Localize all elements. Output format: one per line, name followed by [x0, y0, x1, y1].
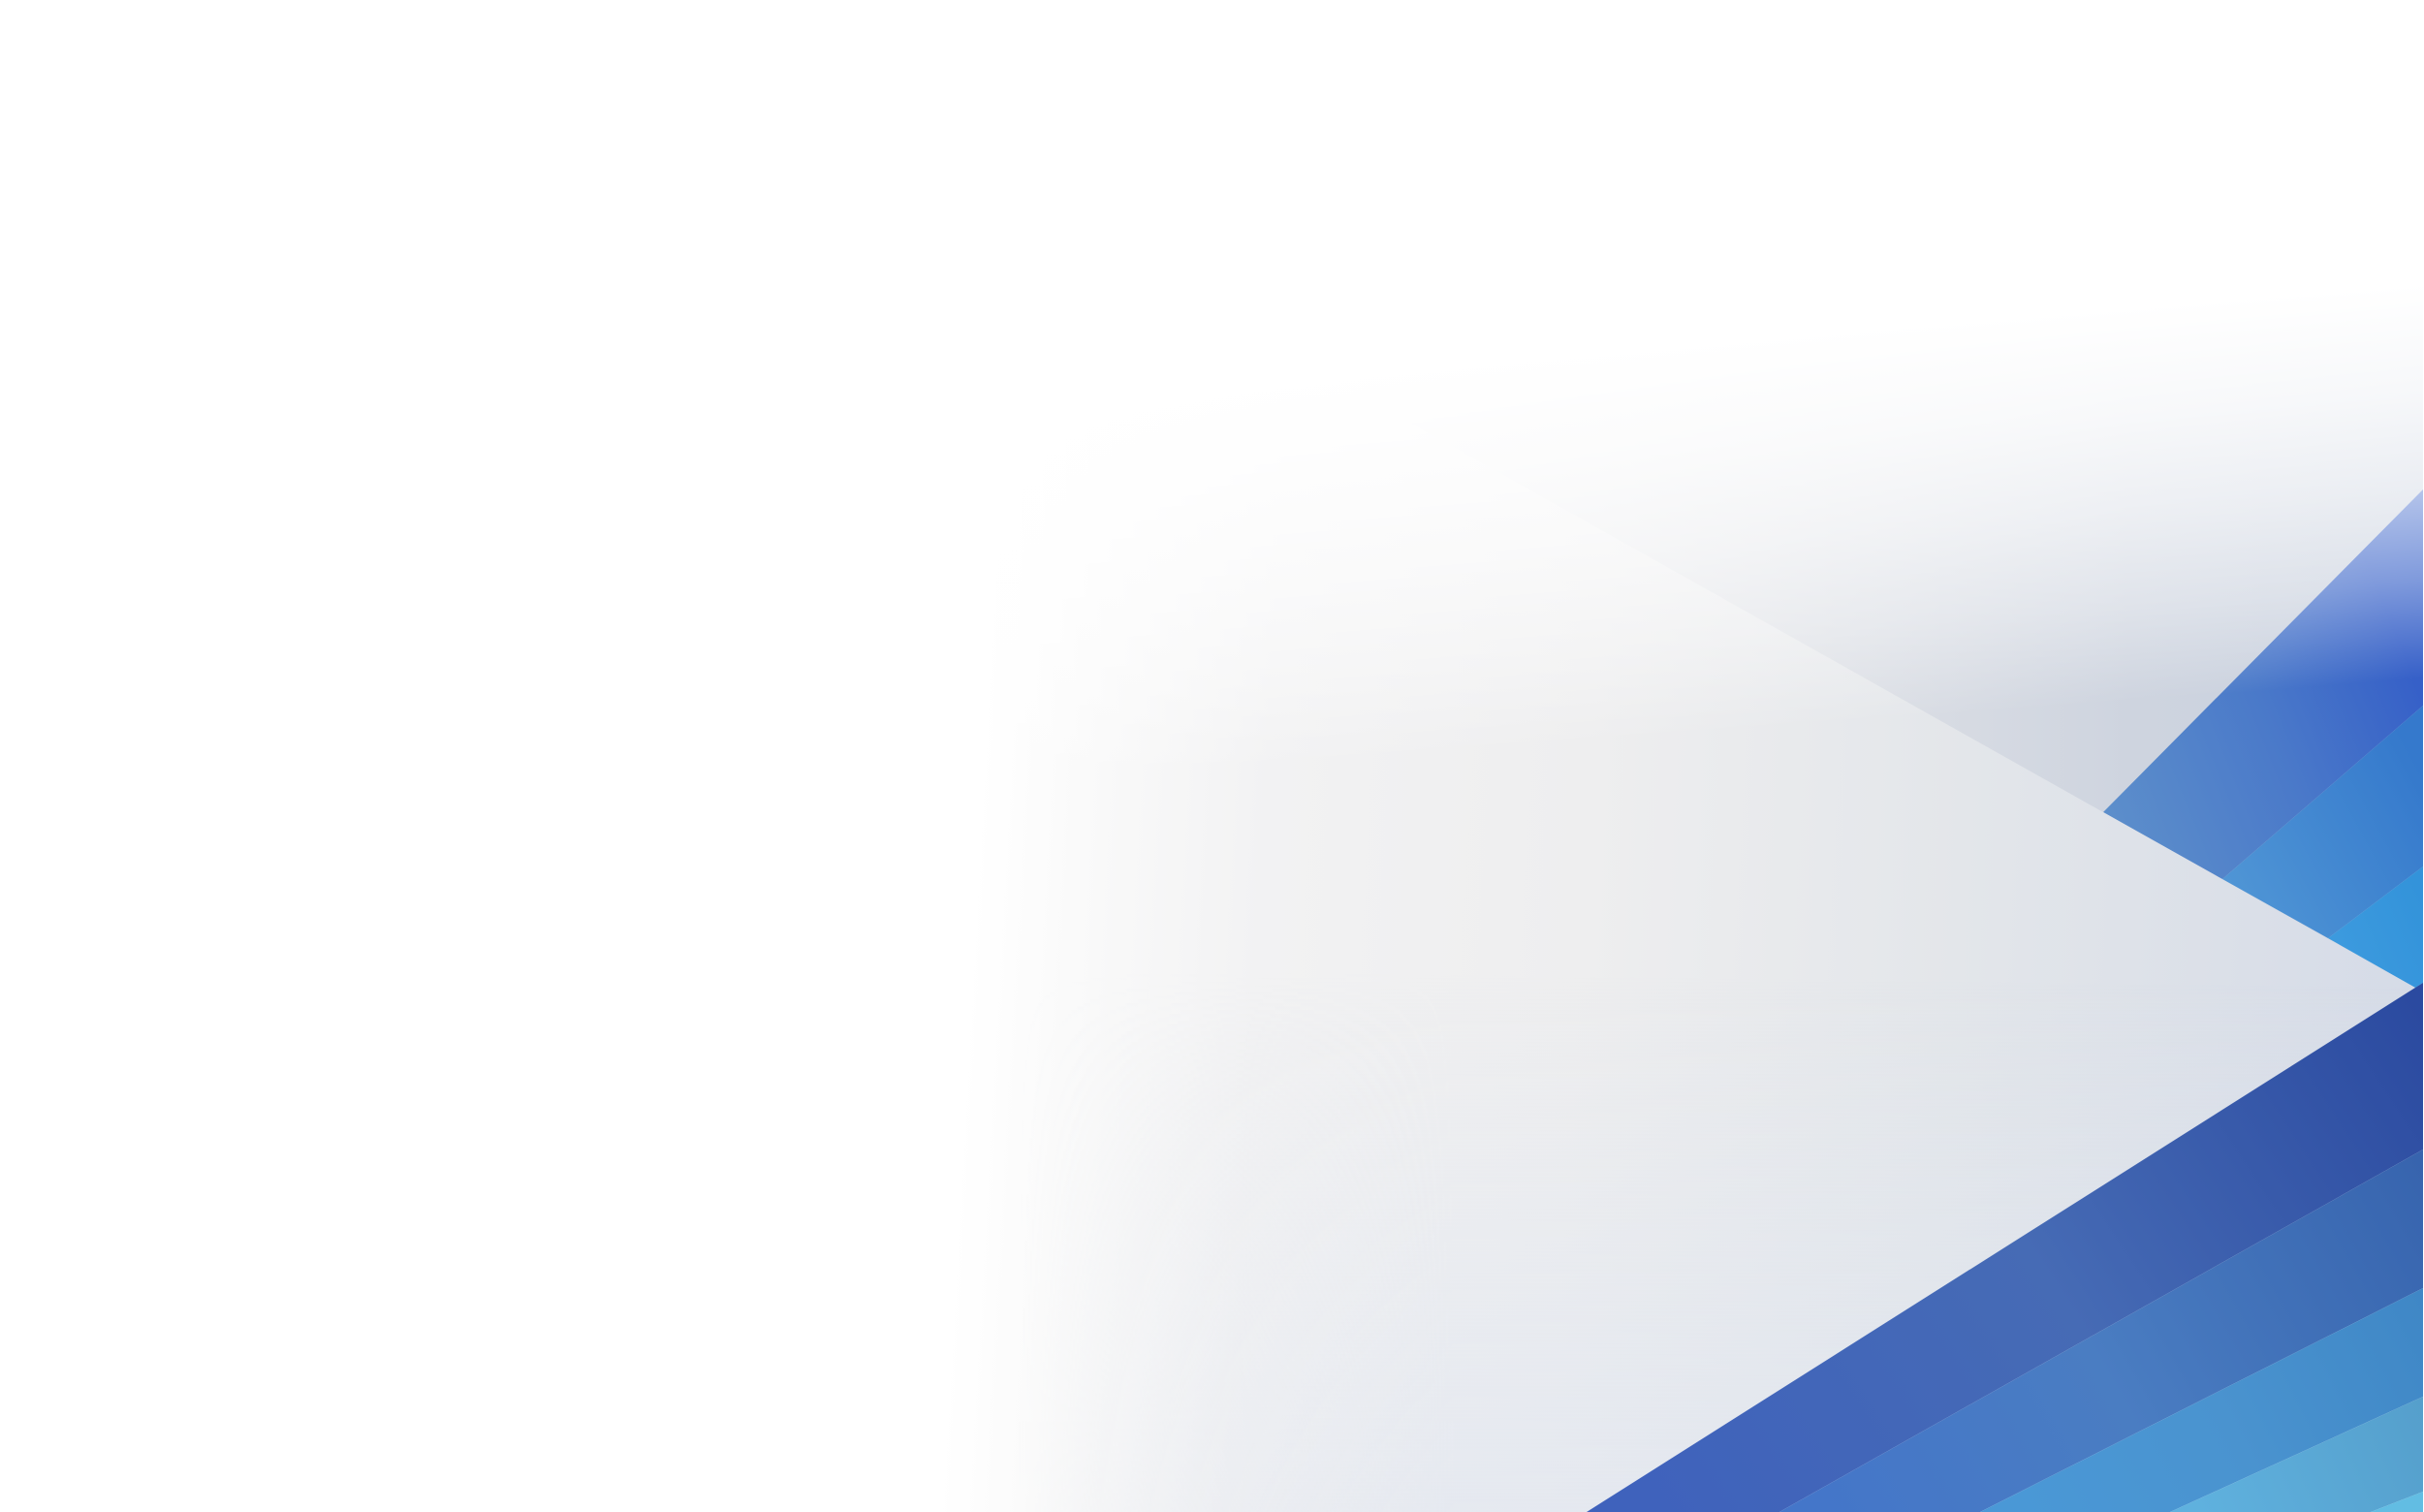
upper blue bands [2103, 489, 2423, 988]
background artwork [1064, 387, 2423, 1512]
lower blue bands [1587, 983, 2423, 1512]
white top fade [872, 0, 2423, 1066]
grey shadow behind triangle [872, 0, 2423, 1066]
large pale triangle [1064, 658, 2415, 1512]
